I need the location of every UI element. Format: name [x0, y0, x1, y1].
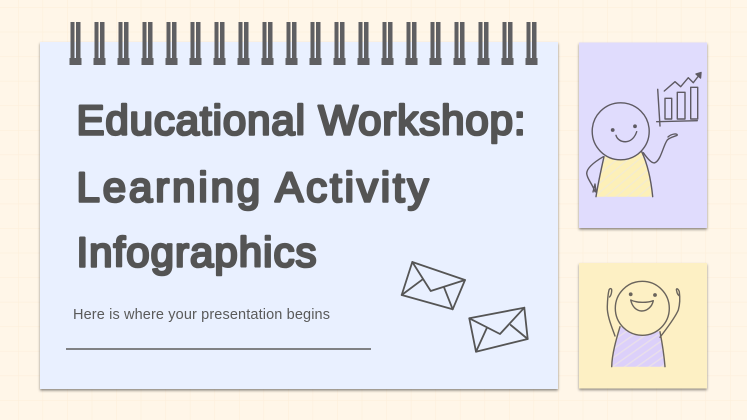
title: Infographics [76, 229, 316, 276]
illustration: cheering person [607, 281, 680, 367]
spiral binding rings [70, 22, 538, 65]
illustration: person presenting chart [587, 72, 701, 197]
icon: envelope bottom [469, 308, 528, 352]
underline rule [66, 348, 371, 350]
panel: notebook page [40, 42, 558, 389]
title: Learning Activity [76, 164, 428, 211]
icon: envelope top [402, 262, 465, 309]
panel: lilac card [579, 42, 707, 228]
title: Educational Workshop: [76, 97, 526, 144]
title [76, 97, 526, 276]
subtitle: Here is where your presentation begins [73, 307, 330, 323]
panel: yellow card [579, 263, 707, 388]
